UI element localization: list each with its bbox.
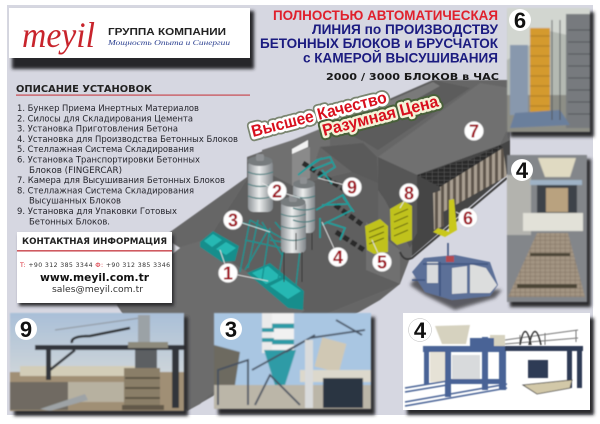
equipment list: 7. Камера для Высушивания Бетонных Блоков [17, 176, 225, 186]
lower left slab [117, 241, 305, 411]
badge 6: 6 [514, 8, 526, 33]
yellow fingercar 6 [433, 199, 457, 237]
photo 4: block production [507, 155, 591, 307]
main title: ЛИНИЯ по ПРОИЗВОДСТВУ [312, 22, 499, 37]
badge 9 [15, 317, 37, 342]
badge 3: 3 [225, 317, 237, 342]
website: www.meyil.com.tr [40, 271, 150, 284]
silos [248, 154, 315, 282]
yellow rack 5 [365, 219, 388, 254]
drying chamber 7 [378, 83, 510, 256]
main title: с КАМЕРОЙ ВЫСУШИВАНИЯ [303, 50, 498, 66]
numbered markers: 8 [404, 184, 414, 204]
numbered markers: 1 [223, 264, 233, 284]
numbered markers: 2 [272, 182, 282, 202]
back roof band [330, 80, 470, 150]
tagline: Мощность Опыта и Синергии [107, 39, 231, 47]
main title: 2000 / 3000 БЛОКОВ в ЧАС [326, 72, 499, 83]
photo 4: machine on white [403, 313, 594, 415]
conveyor blocks [303, 163, 364, 250]
slogan: reasonable price: Разумная Цена [320, 92, 441, 140]
badge 3 [220, 317, 242, 342]
numbered markers: 5 [377, 252, 387, 272]
block machine illustration [410, 243, 502, 310]
company name: ГРУППА КОМПАНИИ [108, 27, 226, 38]
contact box [17, 232, 174, 306]
main title [260, 8, 499, 83]
equipment list [17, 104, 238, 227]
equipment list: 1. Бункер Приема Инертных Материалов [17, 104, 199, 114]
equipment list: 3. Установка Приготовления Бетона [17, 125, 178, 135]
floor lower edge [400, 178, 507, 259]
phone numbers: T: +90 312 385 3344 Ф: +90 312 385 3346 [19, 262, 170, 269]
contact heading: КОНТАКТНАЯ ИНФОРМАЦИЯ [22, 237, 167, 247]
logo wordmark: meyil [22, 15, 95, 55]
description heading: ОПИСАНИЕ УСТАНОВОК [16, 84, 153, 95]
numbered markers: 6 [463, 208, 473, 228]
numbered markers [218, 122, 484, 284]
teal block machine structures [298, 157, 354, 240]
main title: БЕТОННЫХ БЛОКОВ и БРУСЧАТОК [260, 36, 499, 51]
photo 6: fingercar tower [507, 8, 594, 137]
badge 9: 9 [20, 317, 32, 342]
rear walls [205, 125, 400, 320]
block wall [366, 222, 400, 284]
equipment list: 8. Стеллажная Система Складирования [17, 186, 194, 196]
white floor marker [172, 243, 180, 254]
main title: ПОЛНОСТЬЮ АВТОМАТИЧЕСКАЯ [273, 8, 498, 23]
email: sales@meyil.com.tr [52, 285, 144, 295]
photo 3: concrete plant [214, 313, 375, 415]
badge 4 [511, 158, 533, 183]
concrete plant legs [240, 220, 300, 285]
equipment list: 9. Установка для Упаковки Готовых [17, 207, 178, 217]
numbered markers: 9 [347, 178, 357, 198]
photo 9: packaging unit [10, 313, 188, 416]
logo banner [9, 8, 254, 69]
equipment list: 6. Установка Транспортировки Бетонных [17, 156, 201, 166]
equipment list: Бетонных Блоков. [29, 217, 110, 227]
equipment list: 5. Стеллажная Система Складирования [17, 145, 194, 155]
teal bins [200, 231, 304, 310]
factory floor [117, 80, 510, 411]
slogan: high quality: Высшее Качество [249, 89, 389, 141]
factory layout illustration [117, 80, 510, 411]
numbered markers: 4 [333, 248, 343, 268]
slogan: high quality: Высшее Качество [249, 89, 389, 141]
yellow rack 8 [390, 201, 412, 245]
badge 4: 4 [516, 158, 529, 183]
numbered markers: 7 [469, 122, 479, 142]
equipment list: 2. Силосы для Складирования Цемента [17, 114, 193, 124]
equipment list: Блоков (FINGERCAR) [29, 166, 122, 176]
badge 4 [408, 318, 432, 343]
numbered markers: 3 [228, 210, 238, 230]
equipment list: Высушанных Блоков [29, 197, 121, 207]
slogan: reasonable price: Разумная Цена [320, 92, 441, 140]
leader lines [220, 178, 468, 281]
badge 4: 4 [414, 318, 427, 343]
equipment list: 4. Установка для Производства Бетонных Блоков [17, 135, 238, 145]
